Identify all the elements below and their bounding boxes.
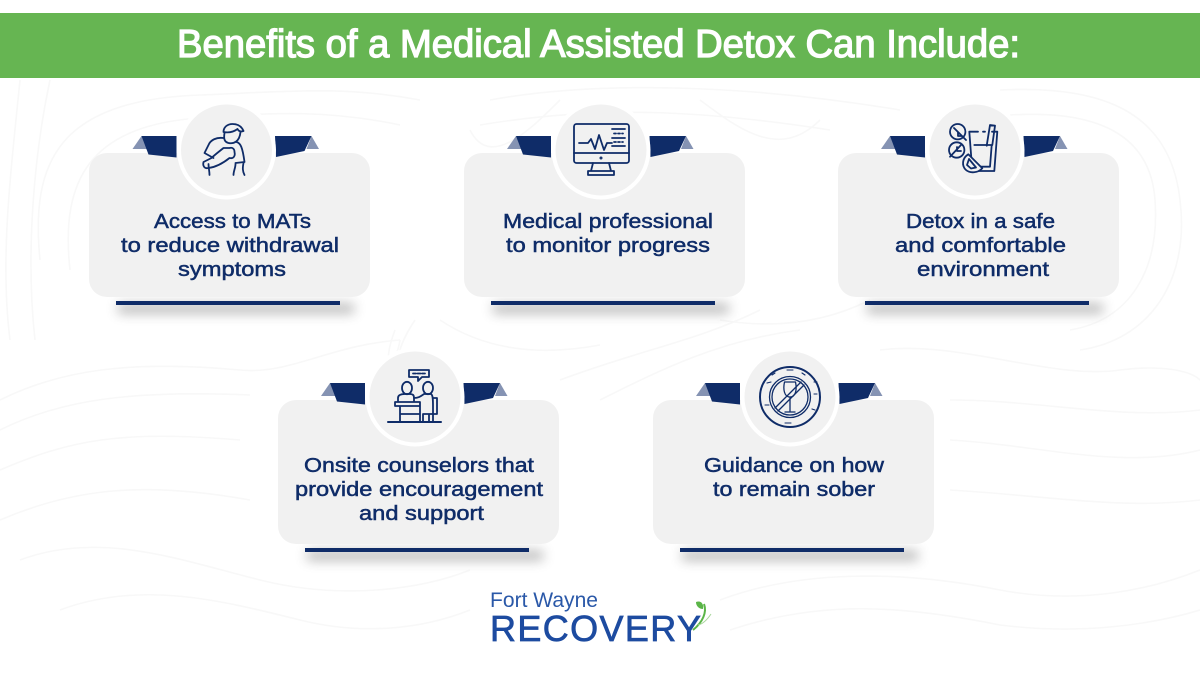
text: safe detox environment: environment [917, 258, 1049, 281]
logo: Fort Wayne Recovery [490, 589, 711, 649]
text: guidance on sobriety: Guidance on how [704, 454, 884, 477]
logo: Fort Wayne Recovery: Fort Wayne [490, 589, 598, 612]
icon: logo leaf [693, 601, 711, 630]
text: access to MATs: to reduce withdrawal [121, 234, 339, 257]
panel: guidance on sobriety [653, 348, 934, 560]
panel: medical professional [464, 100, 745, 313]
text: safe detox environment: Detox in a safe [906, 210, 1055, 233]
panel: access to MATs [89, 100, 370, 313]
text: onsite counselors: Onsite counselors that [304, 454, 534, 477]
icon: counselor at desk [388, 370, 441, 422]
icon: monitor with pulse [574, 124, 629, 175]
text: medical professional: to monitor progress [506, 234, 710, 257]
icon: no alcohol sign [760, 367, 820, 427]
text: guidance on sobriety [704, 454, 884, 501]
text: safe detox environment: and comfortable [895, 234, 1066, 257]
icon: person holding chest [203, 124, 244, 175]
text: onsite counselors: provide encouragement [295, 478, 543, 501]
text: onsite counselors: and support [359, 502, 484, 525]
text: access to MATs: symptoms [178, 258, 286, 281]
panel: safe detox environment [838, 100, 1119, 313]
text: access to MATs: Access to MATs [154, 210, 311, 233]
text: safe detox environment [895, 210, 1066, 281]
logo: Fort Wayne Recovery: RECOVERY [490, 608, 701, 649]
icon: detox drink with leaves [949, 124, 997, 172]
text: medical professional: Medical professional [503, 210, 713, 233]
title: Benefits of a Medical Assisted Detox Can Include: [177, 23, 1020, 66]
title banner [0, 13, 1200, 78]
text: guidance on sobriety: to remain sober [713, 478, 875, 501]
text: medical professional [503, 210, 713, 257]
text: access to MATs [121, 210, 339, 281]
text: onsite counselors [295, 454, 543, 525]
panel: onsite counselors [278, 348, 559, 560]
